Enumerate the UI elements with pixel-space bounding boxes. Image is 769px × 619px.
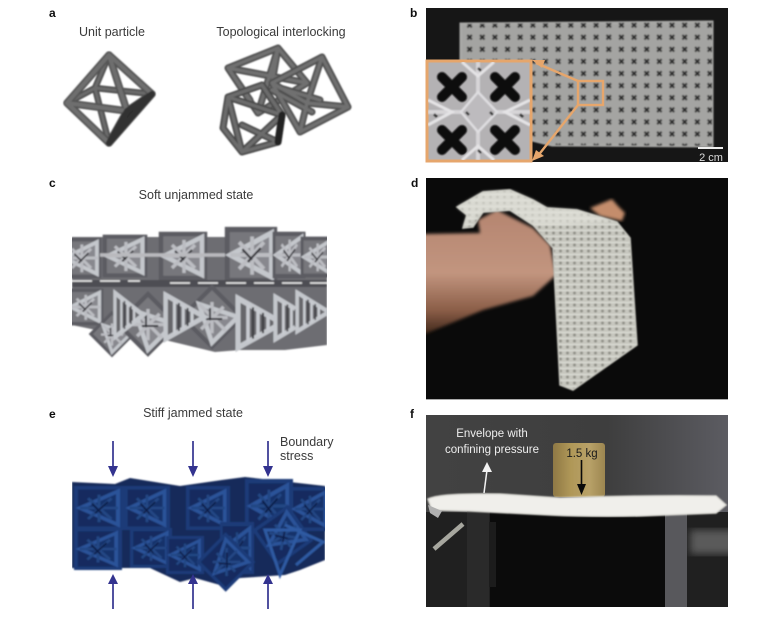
- arrows: boundary stress: [108, 441, 273, 609]
- label f: f: [410, 407, 415, 421]
- zoom box and connector lines: [532, 60, 603, 161]
- printed sheet: [461, 22, 712, 146]
- heading: topological interlocking: Topological interlocking: [216, 25, 346, 39]
- panel f: loaded sheet photo: [410, 407, 740, 607]
- panel a: particles: [49, 6, 348, 152]
- boundary stress label: [280, 435, 334, 463]
- label b: b: [410, 6, 417, 20]
- heading: soft unjammed state: Soft unjammed state: [139, 188, 253, 202]
- label a: a: [49, 6, 56, 20]
- scale bar: [698, 147, 723, 164]
- tube: [434, 524, 463, 549]
- icon: interlocked octahedra: [223, 48, 348, 152]
- white granular sheet: [428, 494, 726, 516]
- arrow: envelope: [482, 462, 492, 493]
- hand and arm: [420, 199, 625, 336]
- jammed particle layers: [72, 477, 328, 589]
- envelope label: confining pressure: [445, 444, 539, 456]
- panel b: printed sheet photo: [410, 6, 728, 164]
- envelope label: Envelope with: [456, 428, 528, 440]
- boundary stress label: Boundary: [280, 435, 334, 449]
- particle layers: [63, 229, 332, 355]
- heading: unit particle: Unit particle: [79, 25, 145, 39]
- frame line: [426, 398, 728, 400]
- panel c: soft unjammed state: [49, 176, 332, 355]
- label d: d: [411, 176, 418, 190]
- photo background: [426, 415, 740, 607]
- label e: e: [49, 407, 56, 421]
- left envelope flap: [428, 505, 442, 518]
- photo background: [426, 178, 728, 399]
- photo background: [426, 8, 728, 162]
- envelope label: [445, 428, 539, 456]
- label c: c: [49, 176, 56, 190]
- icon: octahedron unit particle: [67, 55, 152, 143]
- inset magnified view: [427, 61, 531, 161]
- scale bar: 2 cm: [699, 152, 723, 164]
- boundary stress label: stress: [280, 449, 313, 463]
- load label: 1.5 kg: [566, 448, 598, 460]
- arrow: load: [577, 460, 586, 495]
- panel d: sheet draped over hand photo: [411, 176, 728, 400]
- heading: stiff jammed state: Stiff jammed state: [143, 406, 243, 420]
- panel e: stiff jammed state: [49, 406, 334, 609]
- draped granular sheet: [457, 190, 637, 390]
- brass weight: [553, 443, 605, 497]
- support legs: [467, 511, 687, 607]
